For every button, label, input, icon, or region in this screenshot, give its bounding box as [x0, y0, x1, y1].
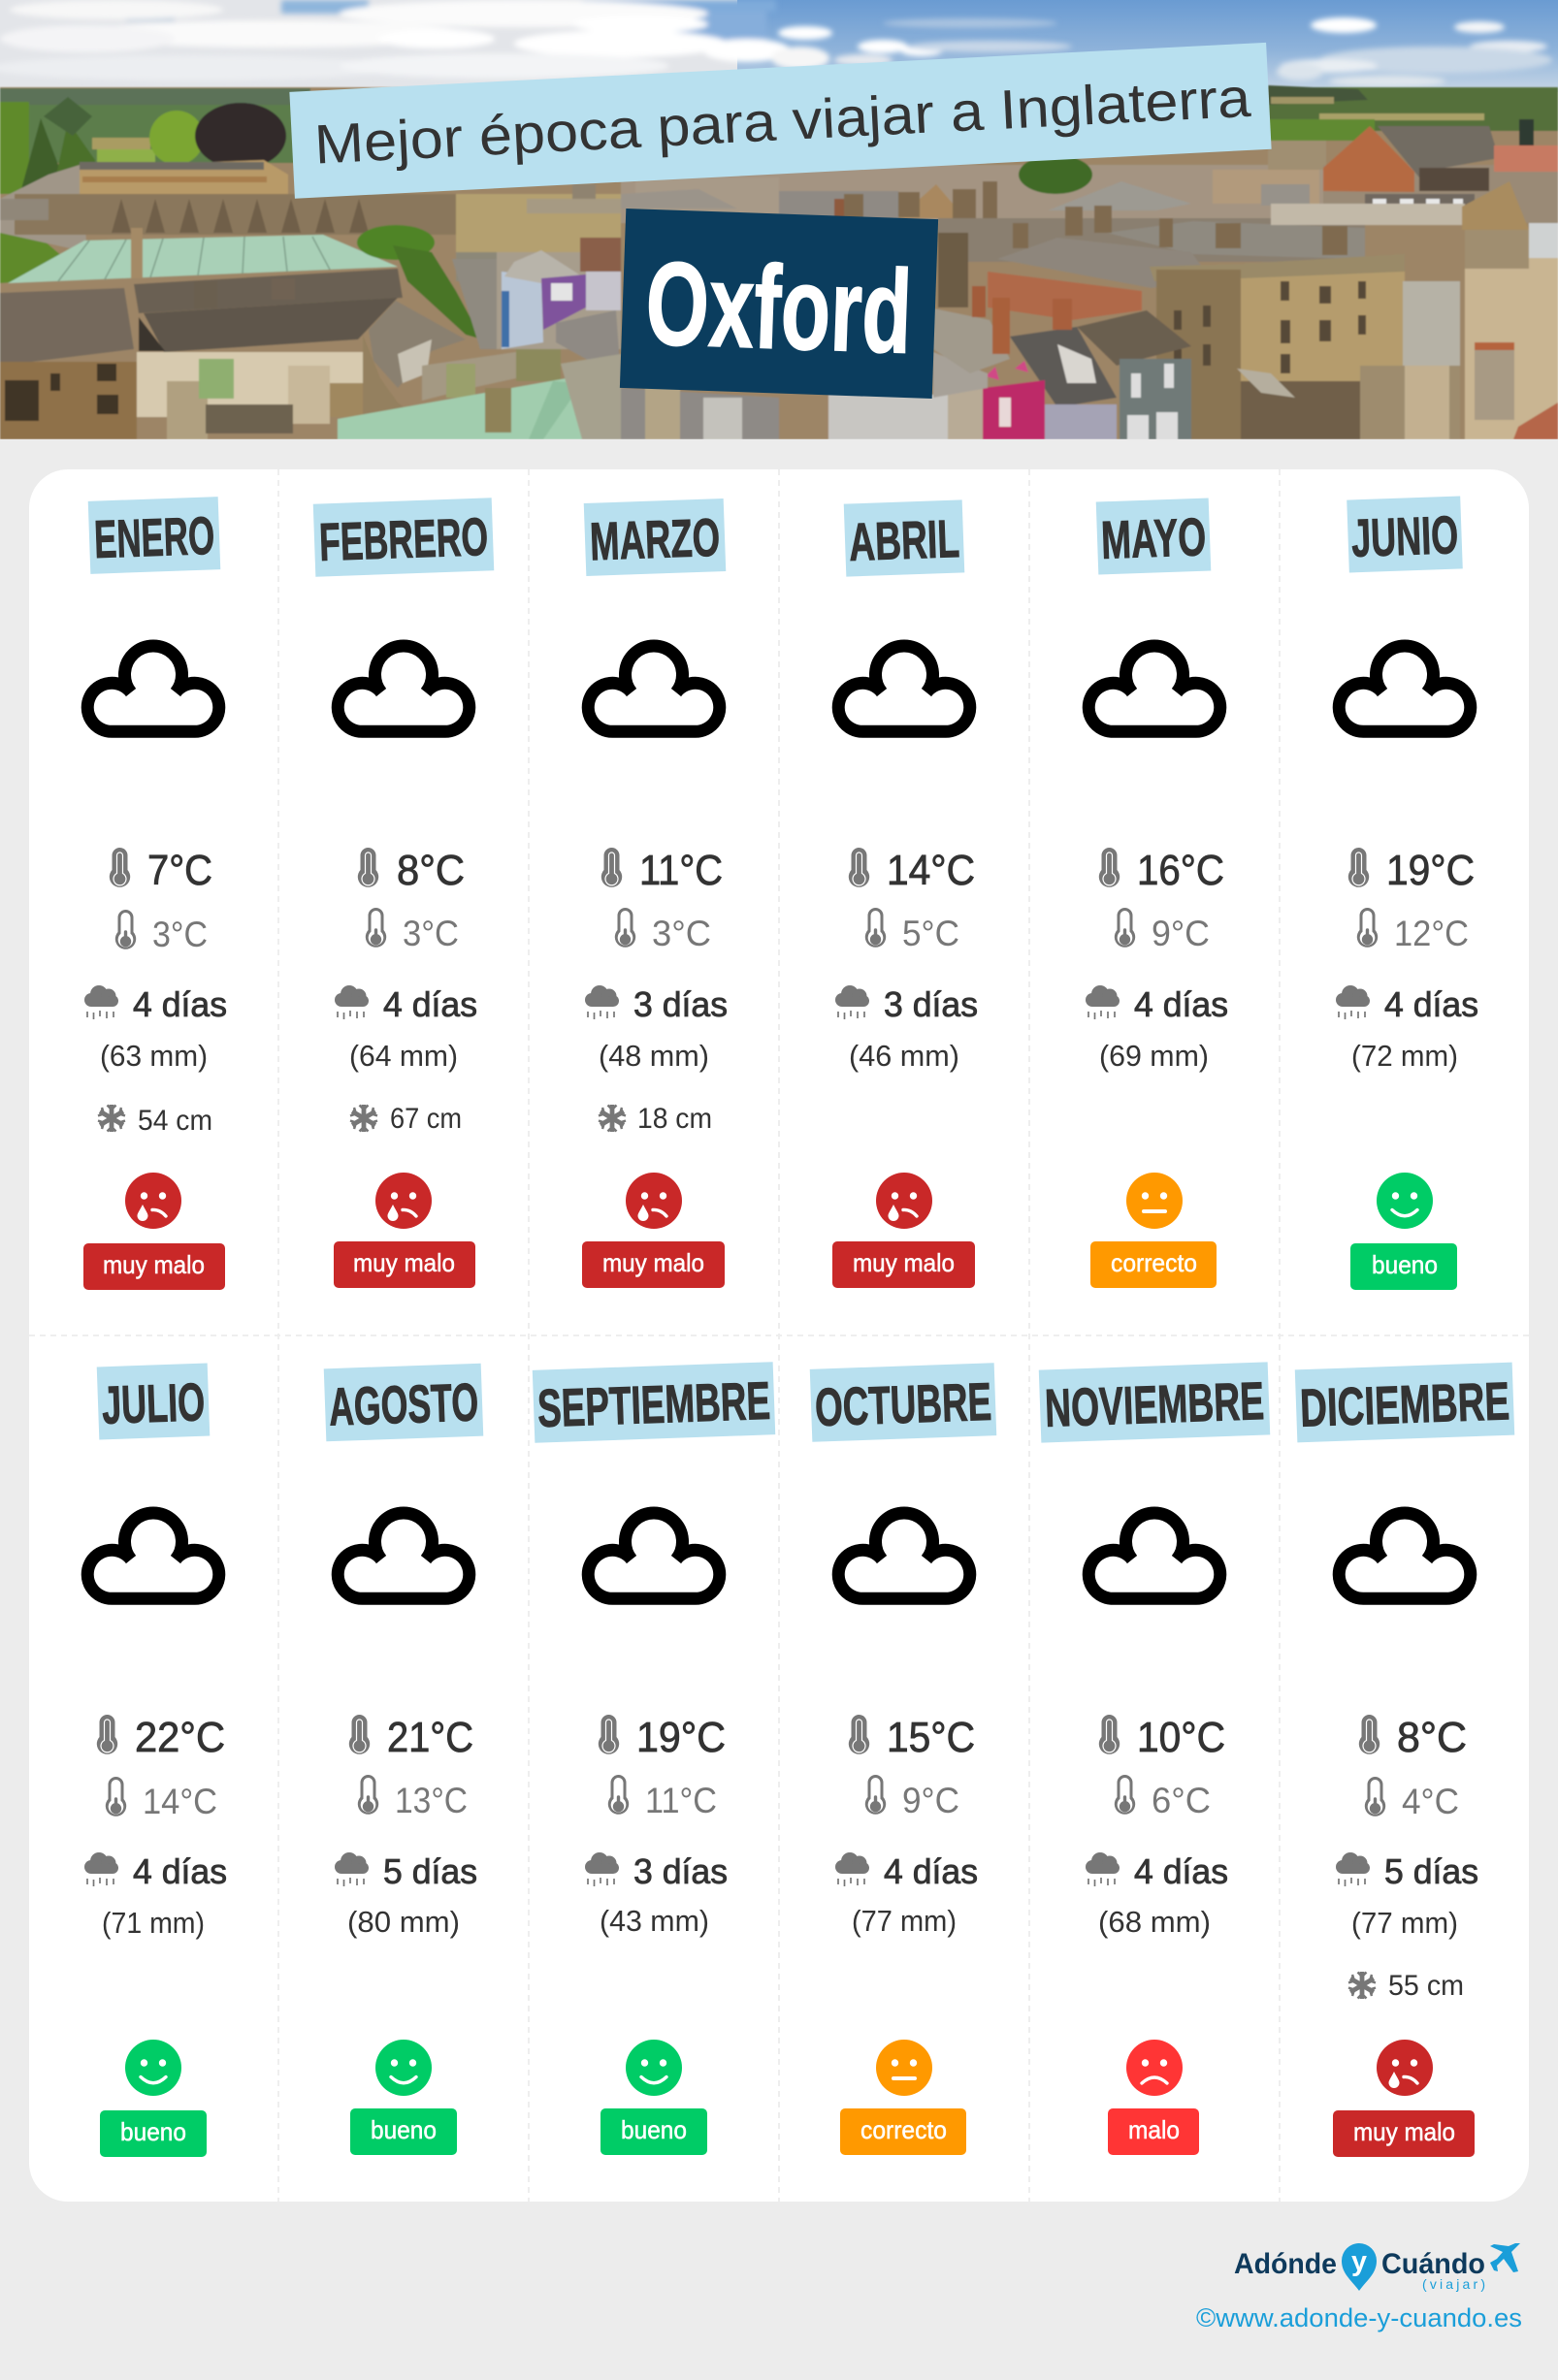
rainy days: 5 días [1384, 1851, 1478, 1891]
icon: rating face [125, 2040, 181, 2096]
rating badge [600, 2108, 707, 2155]
icon: cloud [838, 646, 970, 731]
icon: rating face [626, 2040, 682, 2096]
rating badge [1333, 2110, 1475, 2157]
mid roofs [938, 218, 1365, 262]
month label: MAYO [1100, 506, 1207, 570]
month: febrero [313, 498, 494, 1288]
snowfall: 54 cm [138, 1105, 212, 1137]
rating badge: bueno [621, 2115, 687, 2144]
icon: cloud [588, 646, 720, 731]
high temperature: 11°C [639, 847, 723, 894]
high temperature [1348, 847, 1475, 894]
high temperature: 19°C [1386, 847, 1475, 894]
rating badge: muy malo [1353, 2117, 1455, 2146]
rainy days: 4 días [1134, 984, 1228, 1024]
rainy days: 4 días [383, 984, 477, 1024]
low temperature [865, 1775, 959, 1820]
panel: monthly climate table [29, 469, 1529, 2202]
low temperature [358, 1775, 468, 1820]
month label [313, 498, 494, 577]
month label: JUNIO [1350, 504, 1459, 568]
low temperature [1115, 1775, 1211, 1820]
rating badge [350, 2108, 457, 2155]
footer logo: Adónde y Cuándo: (viajar) [1422, 2276, 1485, 2292]
icon: rating face [375, 2040, 432, 2096]
month: julio [84, 1364, 227, 2157]
rating badge: bueno [371, 2115, 437, 2144]
rainy days: 5 días [383, 1851, 477, 1891]
grey roofs [0, 288, 134, 366]
brick [997, 238, 1211, 288]
hills and trees right [1268, 87, 1558, 131]
month: agosto [324, 1364, 483, 2155]
rating badge: muy malo [602, 1248, 704, 1277]
rainy days [1336, 984, 1478, 1024]
rating badge: correcto [860, 2115, 947, 2144]
month label: FEBRERO [318, 506, 489, 572]
high temperature: 7°C [147, 847, 212, 894]
rating badge: correcto [1111, 1248, 1197, 1277]
low temperature [615, 908, 711, 953]
icon: cloud [338, 1513, 470, 1598]
city banner: Oxford: Oxford [644, 237, 914, 378]
rating badge [582, 1241, 725, 1288]
high temperature [349, 1714, 473, 1761]
high temperature [849, 847, 975, 894]
high temperature [601, 847, 723, 894]
icon: rating face [626, 1173, 682, 1229]
hills and trees left [0, 88, 310, 108]
rainy days [835, 1851, 978, 1891]
rainfall: (64 mm) [349, 1039, 458, 1073]
rating badge [1108, 2108, 1199, 2155]
rainy days [1336, 1851, 1478, 1891]
footer logo: Adónde y Cuándo: Adónde [1234, 2248, 1337, 2280]
rainfall: (68 mm) [1098, 1905, 1211, 1939]
road [452, 259, 497, 349]
brick gable [1323, 165, 1558, 223]
high temperature [110, 847, 212, 894]
low temperature: 3°C [403, 914, 459, 953]
low temperature [865, 908, 959, 953]
high temperature: 8°C [1397, 1714, 1467, 1761]
month: diciembre [1295, 1363, 1514, 2157]
high temperature: 16°C [1137, 847, 1224, 894]
month: junio [1336, 496, 1478, 1290]
month label [97, 1364, 210, 1439]
rating badge: muy malo [853, 1248, 955, 1277]
month label: MARZO [589, 507, 721, 571]
rainy days [84, 984, 227, 1024]
high temperature [849, 1714, 975, 1761]
month label [1096, 498, 1211, 575]
month label [88, 497, 220, 574]
icon: rating face [1126, 2040, 1183, 2096]
rainy days [585, 1851, 728, 1891]
low temperature: 6°C [1152, 1781, 1211, 1820]
month label [810, 1363, 996, 1442]
high temperature [599, 1714, 726, 1761]
low temperature: 4°C [1402, 1782, 1459, 1821]
icon: cloud [338, 646, 470, 731]
rainy days: 4 días [884, 1851, 978, 1891]
icon: cloud [588, 1513, 720, 1598]
upper band right of title [621, 165, 1329, 223]
icon: cloud [1088, 646, 1220, 731]
snowfall: 18 cm [637, 1103, 712, 1135]
low temperature: 12°C [1394, 914, 1469, 953]
icon: cloud [87, 1513, 219, 1598]
rating badge: bueno [120, 2117, 186, 2146]
icon: cloud [1088, 1513, 1220, 1598]
high temperature: 15°C [887, 1714, 975, 1761]
low temperature: 13°C [395, 1781, 468, 1820]
high temperature [1359, 1714, 1467, 1761]
rainy days [835, 984, 978, 1024]
high temperature: 21°C [387, 1714, 473, 1761]
low temperature: 9°C [1152, 914, 1210, 953]
rainfall: (69 mm) [1099, 1039, 1209, 1073]
rating badge [334, 1241, 475, 1288]
rating badge: muy malo [353, 1248, 455, 1277]
low temperature [366, 908, 459, 953]
month: abril [832, 499, 978, 1288]
month label [533, 1362, 775, 1443]
icon: rating face [876, 1173, 932, 1229]
rainy days: 4 días [133, 984, 227, 1024]
icon: rating face [375, 1173, 432, 1229]
city banner: Oxford [620, 209, 938, 399]
rainy days: 3 días [633, 984, 728, 1024]
rainfall: (72 mm) [1351, 1039, 1458, 1073]
month: septiembre [533, 1362, 775, 2155]
high temperature [1099, 1714, 1225, 1761]
high temperature: 19°C [636, 1714, 726, 1761]
low temperature: 5°C [902, 914, 959, 953]
rating badge [840, 2108, 966, 2155]
icon: rating face [1377, 2040, 1433, 2096]
icon: location pin [1342, 2243, 1377, 2291]
icon: cloud [87, 646, 219, 731]
rainfall: (71 mm) [102, 1906, 205, 1940]
stone and cream walls [0, 362, 137, 439]
rating badge: bueno [1372, 1250, 1438, 1279]
icon: rating face [876, 2040, 932, 2096]
footer website: ©www.adonde-y-cuando.es [1196, 2303, 1522, 2332]
high temperature [97, 1714, 225, 1761]
month label: OCTUBRE [814, 1371, 992, 1437]
icon: cloud [1339, 1513, 1471, 1598]
green roof bottom [337, 378, 582, 439]
hero photo: Oxford skyline [0, 0, 1558, 439]
month: octubre [810, 1363, 996, 2155]
rainy days: 3 días [884, 984, 978, 1024]
high temperature [1099, 847, 1224, 894]
rating badge [1350, 1243, 1457, 1290]
rainfall: (77 mm) [852, 1904, 957, 1938]
high temperature [358, 847, 465, 894]
rainy days: 4 días [133, 1851, 227, 1891]
snowfall [350, 1103, 462, 1135]
rating badge: muy malo [103, 1250, 205, 1279]
icon: rating face [1377, 1173, 1433, 1229]
high temperature: 22°C [135, 1714, 225, 1761]
low temperature: 14°C [143, 1782, 217, 1821]
low temperature [1365, 1777, 1459, 1821]
month label [1347, 496, 1463, 573]
icon: cloud [1339, 646, 1471, 731]
low temperature [106, 1777, 217, 1821]
title banner: Mejor época para viajar a Inglaterra [313, 67, 1252, 177]
low temperature [1357, 908, 1469, 953]
month label: SEPTIEMBRE [536, 1370, 771, 1438]
footer logo: Adónde y Cuándo [1234, 2243, 1520, 2292]
low temperature [1115, 908, 1210, 953]
rainy days [84, 1851, 227, 1891]
rating badge [83, 1243, 225, 1290]
stone building [1241, 269, 1405, 381]
front houses [1077, 310, 1191, 366]
month label [1039, 1362, 1270, 1443]
icon: location pin: y [1351, 2246, 1367, 2277]
icon: rating face [1126, 1173, 1183, 1229]
footer logo: Adónde y Cuándo: Cuándo [1381, 2248, 1485, 2280]
rating badge [832, 1241, 975, 1288]
low temperature: 3°C [152, 915, 208, 954]
right tower [1464, 258, 1558, 439]
rating badge: malo [1128, 2115, 1180, 2144]
rainy days: 4 días [1384, 984, 1478, 1024]
month: noviembre [1039, 1362, 1270, 2155]
icon: rating face [125, 1173, 181, 1229]
month label: NOVIEMBRE [1044, 1370, 1265, 1438]
month: mayo [1086, 498, 1228, 1288]
rating badge [1090, 1241, 1217, 1288]
title banner [289, 43, 1272, 199]
snowfall: 55 cm [1388, 1970, 1464, 2002]
rainy days: 3 días [633, 1851, 728, 1891]
month label: ABRIL [848, 508, 960, 572]
rainy days [335, 1851, 477, 1891]
rainfall: (48 mm) [599, 1039, 709, 1073]
high temperature: 8°C [397, 847, 465, 894]
month label: ENERO [93, 505, 215, 569]
rainfall: (63 mm) [100, 1039, 208, 1073]
icon: airplane [1490, 2243, 1520, 2272]
low temperature: 3°C [652, 914, 711, 953]
middle houses [497, 252, 621, 349]
month label [584, 499, 726, 576]
month: marzo [582, 499, 728, 1288]
low temperature: 11°C [645, 1781, 717, 1820]
month: enero [83, 497, 227, 1290]
green roof [8, 235, 398, 283]
chimneys [844, 181, 1347, 255]
high temperature: 10°C [1137, 1714, 1225, 1761]
rainfall: (46 mm) [849, 1039, 959, 1073]
low temperature: 9°C [902, 1781, 959, 1820]
rainy days [1086, 984, 1228, 1024]
tree mid [357, 225, 435, 260]
icon: cloud [838, 1513, 970, 1598]
snowfall [1348, 1970, 1464, 2002]
low temperature [115, 910, 208, 954]
month label: JULIO [101, 1371, 206, 1435]
rainfall: (80 mm) [347, 1905, 460, 1939]
month label [844, 499, 964, 577]
rainy days [335, 984, 477, 1024]
rainy days: 4 días [1134, 1851, 1228, 1891]
low temperature [608, 1775, 717, 1820]
rainfall: (77 mm) [1351, 1906, 1458, 1940]
snowfall [98, 1105, 212, 1137]
snowfall: 67 cm [390, 1103, 462, 1135]
rainy days [1086, 1851, 1228, 1891]
snowfall [599, 1103, 712, 1135]
rainfall: (43 mm) [600, 1904, 709, 1938]
back buildings left [0, 165, 87, 252]
month label: AGOSTO [328, 1371, 479, 1437]
rating badge [100, 2110, 207, 2157]
month label [324, 1364, 483, 1441]
high temperature: 14°C [887, 847, 975, 894]
rainy days [585, 984, 728, 1024]
